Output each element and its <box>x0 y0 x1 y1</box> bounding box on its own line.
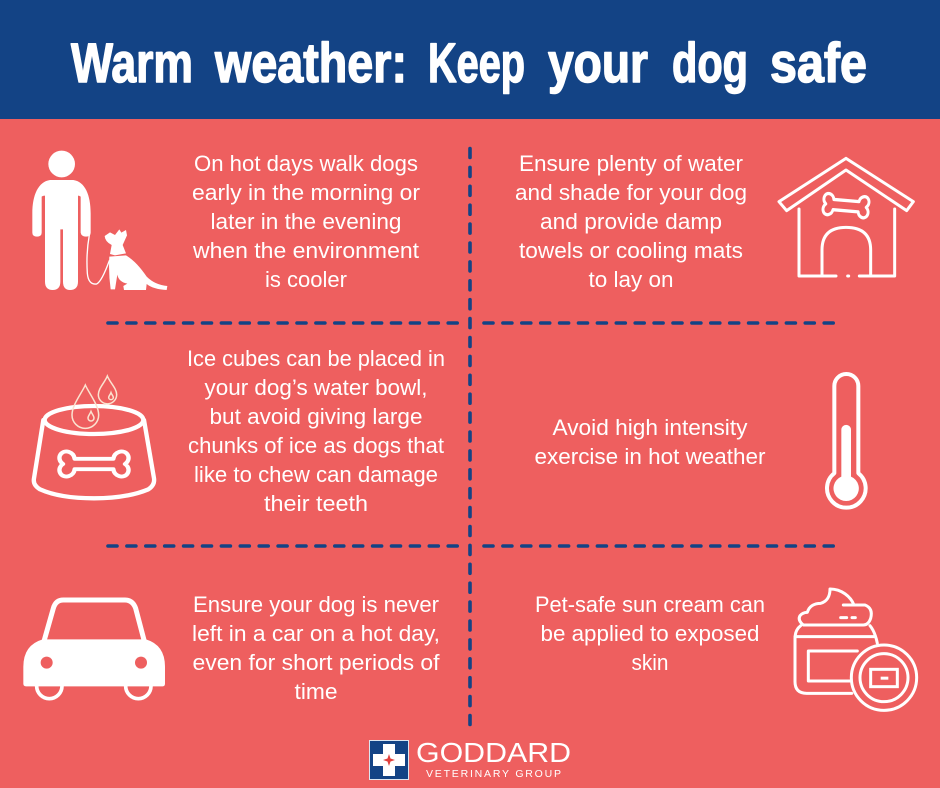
text: walk early or late: later in the evening <box>210 209 402 234</box>
text: avoid exercise: Avoid high intensity <box>552 415 748 440</box>
panel: avoid exercise <box>534 374 866 508</box>
icon: car <box>23 600 165 699</box>
icon: dog bowl with drops <box>34 376 154 498</box>
text: walk early or late <box>192 151 420 292</box>
panel: never in car <box>23 592 440 704</box>
text: walk early or late: early in the morning or <box>192 180 420 205</box>
text: ice cubes: but avoid giving large <box>210 404 422 429</box>
text: water and shade: towels or cooling mats <box>519 238 743 263</box>
title: dog <box>672 31 748 94</box>
title: your <box>548 31 648 94</box>
text: never in car: even for short periods of <box>192 650 440 675</box>
text: walk early or late: when the environment <box>192 238 419 263</box>
logo tagline: VETERINARY GROUP <box>426 768 561 780</box>
icon: person walking dog <box>32 151 167 290</box>
title: safe <box>770 31 867 94</box>
panel: walk early or late <box>32 151 420 292</box>
text: sun cream: skin <box>632 650 668 675</box>
icon: sun cream jar <box>795 589 917 710</box>
text: avoid exercise <box>534 415 766 469</box>
text: ice cubes: chunks of ice as dogs that <box>188 433 444 458</box>
text: ice cubes: like to chew can damage <box>194 462 438 487</box>
text: sun cream: be applied to exposed <box>540 621 760 646</box>
text: never in car <box>192 592 440 704</box>
text: ice cubes: their teeth <box>264 491 368 516</box>
text: ice cubes: Ice cubes can be placed in <box>187 346 445 371</box>
icon: dog house <box>779 158 913 276</box>
text: water and shade: and shade for your dog <box>515 180 747 205</box>
text: ice cubes <box>187 346 445 516</box>
panel: water and shade <box>515 151 913 292</box>
text: avoid exercise: exercise in hot weather <box>534 444 766 469</box>
icon: logo cross <box>370 740 408 780</box>
text: walk early or late: On hot days walk dogs <box>194 151 418 176</box>
panel: ice cubes <box>34 346 445 516</box>
logo: Goddard Veterinary Group <box>370 737 571 780</box>
header band <box>0 0 940 119</box>
title: Warm <box>71 31 193 94</box>
text: water and shade: Ensure plenty of water <box>519 151 743 176</box>
text: never in car: Ensure your dog is never <box>193 592 439 617</box>
text: never in car: left in a car on a hot day, <box>192 621 440 646</box>
text: walk early or late: is cooler <box>265 267 347 292</box>
text: water and shade: to lay on <box>588 267 674 292</box>
text: sun cream: Pet-safe sun cream can <box>535 592 765 617</box>
text: water and shade: and provide damp <box>540 209 722 234</box>
text: ice cubes: your dog’s water bowl, <box>204 375 428 400</box>
title: weather: <box>214 31 407 94</box>
icon: thermometer <box>827 374 866 508</box>
title: Keep <box>428 31 525 94</box>
logo wordmark: GODDARD <box>416 737 571 768</box>
text: never in car: time <box>294 679 338 704</box>
panel: sun cream <box>535 589 917 710</box>
text: water and shade <box>515 151 747 292</box>
title <box>71 31 867 94</box>
text: sun cream <box>535 592 765 675</box>
